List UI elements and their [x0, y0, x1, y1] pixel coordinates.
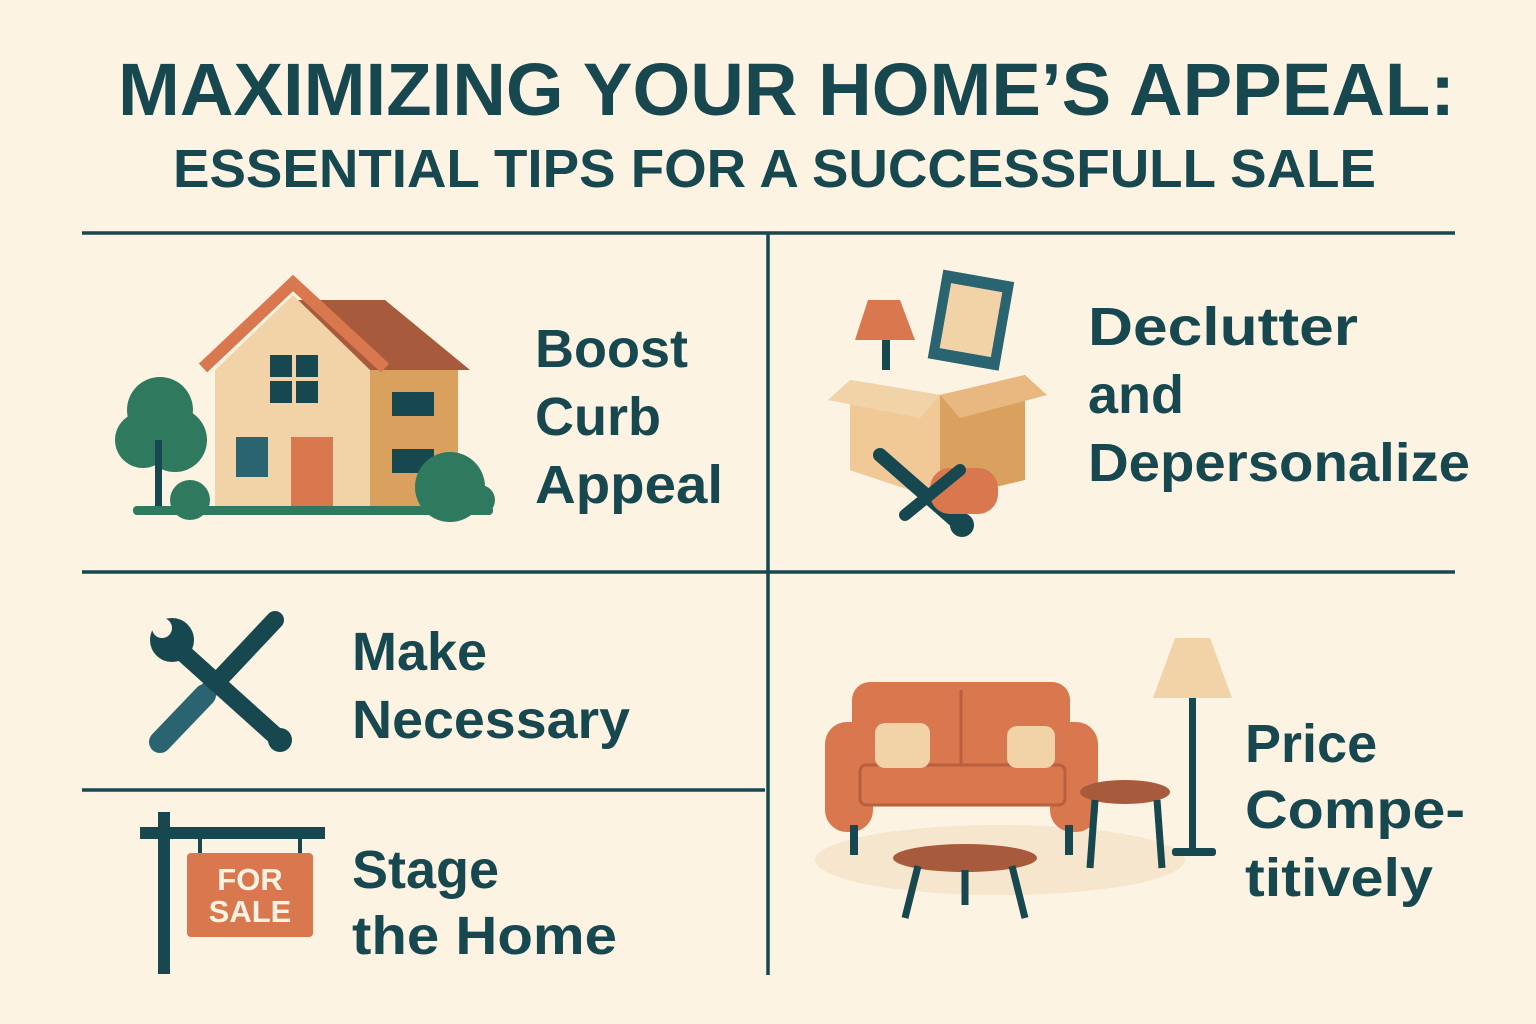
- text: Boost Curb Appeal: Curb: [535, 387, 661, 447]
- text: Make Necessary: [352, 622, 630, 750]
- title: ESSENTIAL TIPS FOR A SUCCESSFULL SALE: [173, 139, 1376, 199]
- text: Declutter and Depersonalize: and: [1088, 365, 1184, 425]
- title: MAXIMIZING YOUR HOME’S APPEAL:: [118, 48, 1455, 131]
- icon: for sale sign: SALE: [209, 894, 291, 929]
- text: Boost Curb Appeal: Appeal: [535, 455, 723, 515]
- text: Price Competitively: Price: [1245, 714, 1377, 774]
- text: Price Competitively: [1245, 714, 1465, 908]
- icon: house: [115, 283, 495, 522]
- title: [118, 48, 1455, 199]
- icon: for sale sign: [140, 812, 325, 974]
- text: Declutter and Depersonalize: Declutter: [1088, 297, 1358, 357]
- text: Make Necessary: Necessary: [352, 690, 630, 750]
- icon: for sale sign: FOR: [217, 862, 283, 897]
- text: Stage the Home: the Home: [352, 906, 617, 966]
- icon: box: [828, 270, 1047, 537]
- text: Boost Curb Appeal: [535, 319, 723, 515]
- icon: sofa and lamp: [815, 638, 1232, 918]
- icon: tools: [150, 618, 292, 752]
- text: Stage the Home: [352, 840, 617, 966]
- text: Declutter and Depersonalize: Depersonalize: [1088, 433, 1470, 493]
- text: Make Necessary: Make: [352, 622, 487, 682]
- text: Stage the Home: Stage: [352, 840, 499, 900]
- text: Declutter and Depersonalize: [1088, 297, 1470, 493]
- text: Price Competitively: titively: [1245, 848, 1433, 908]
- text: Price Competitively: Compe-: [1245, 780, 1465, 840]
- text: Boost Curb Appeal: Boost: [535, 319, 688, 379]
